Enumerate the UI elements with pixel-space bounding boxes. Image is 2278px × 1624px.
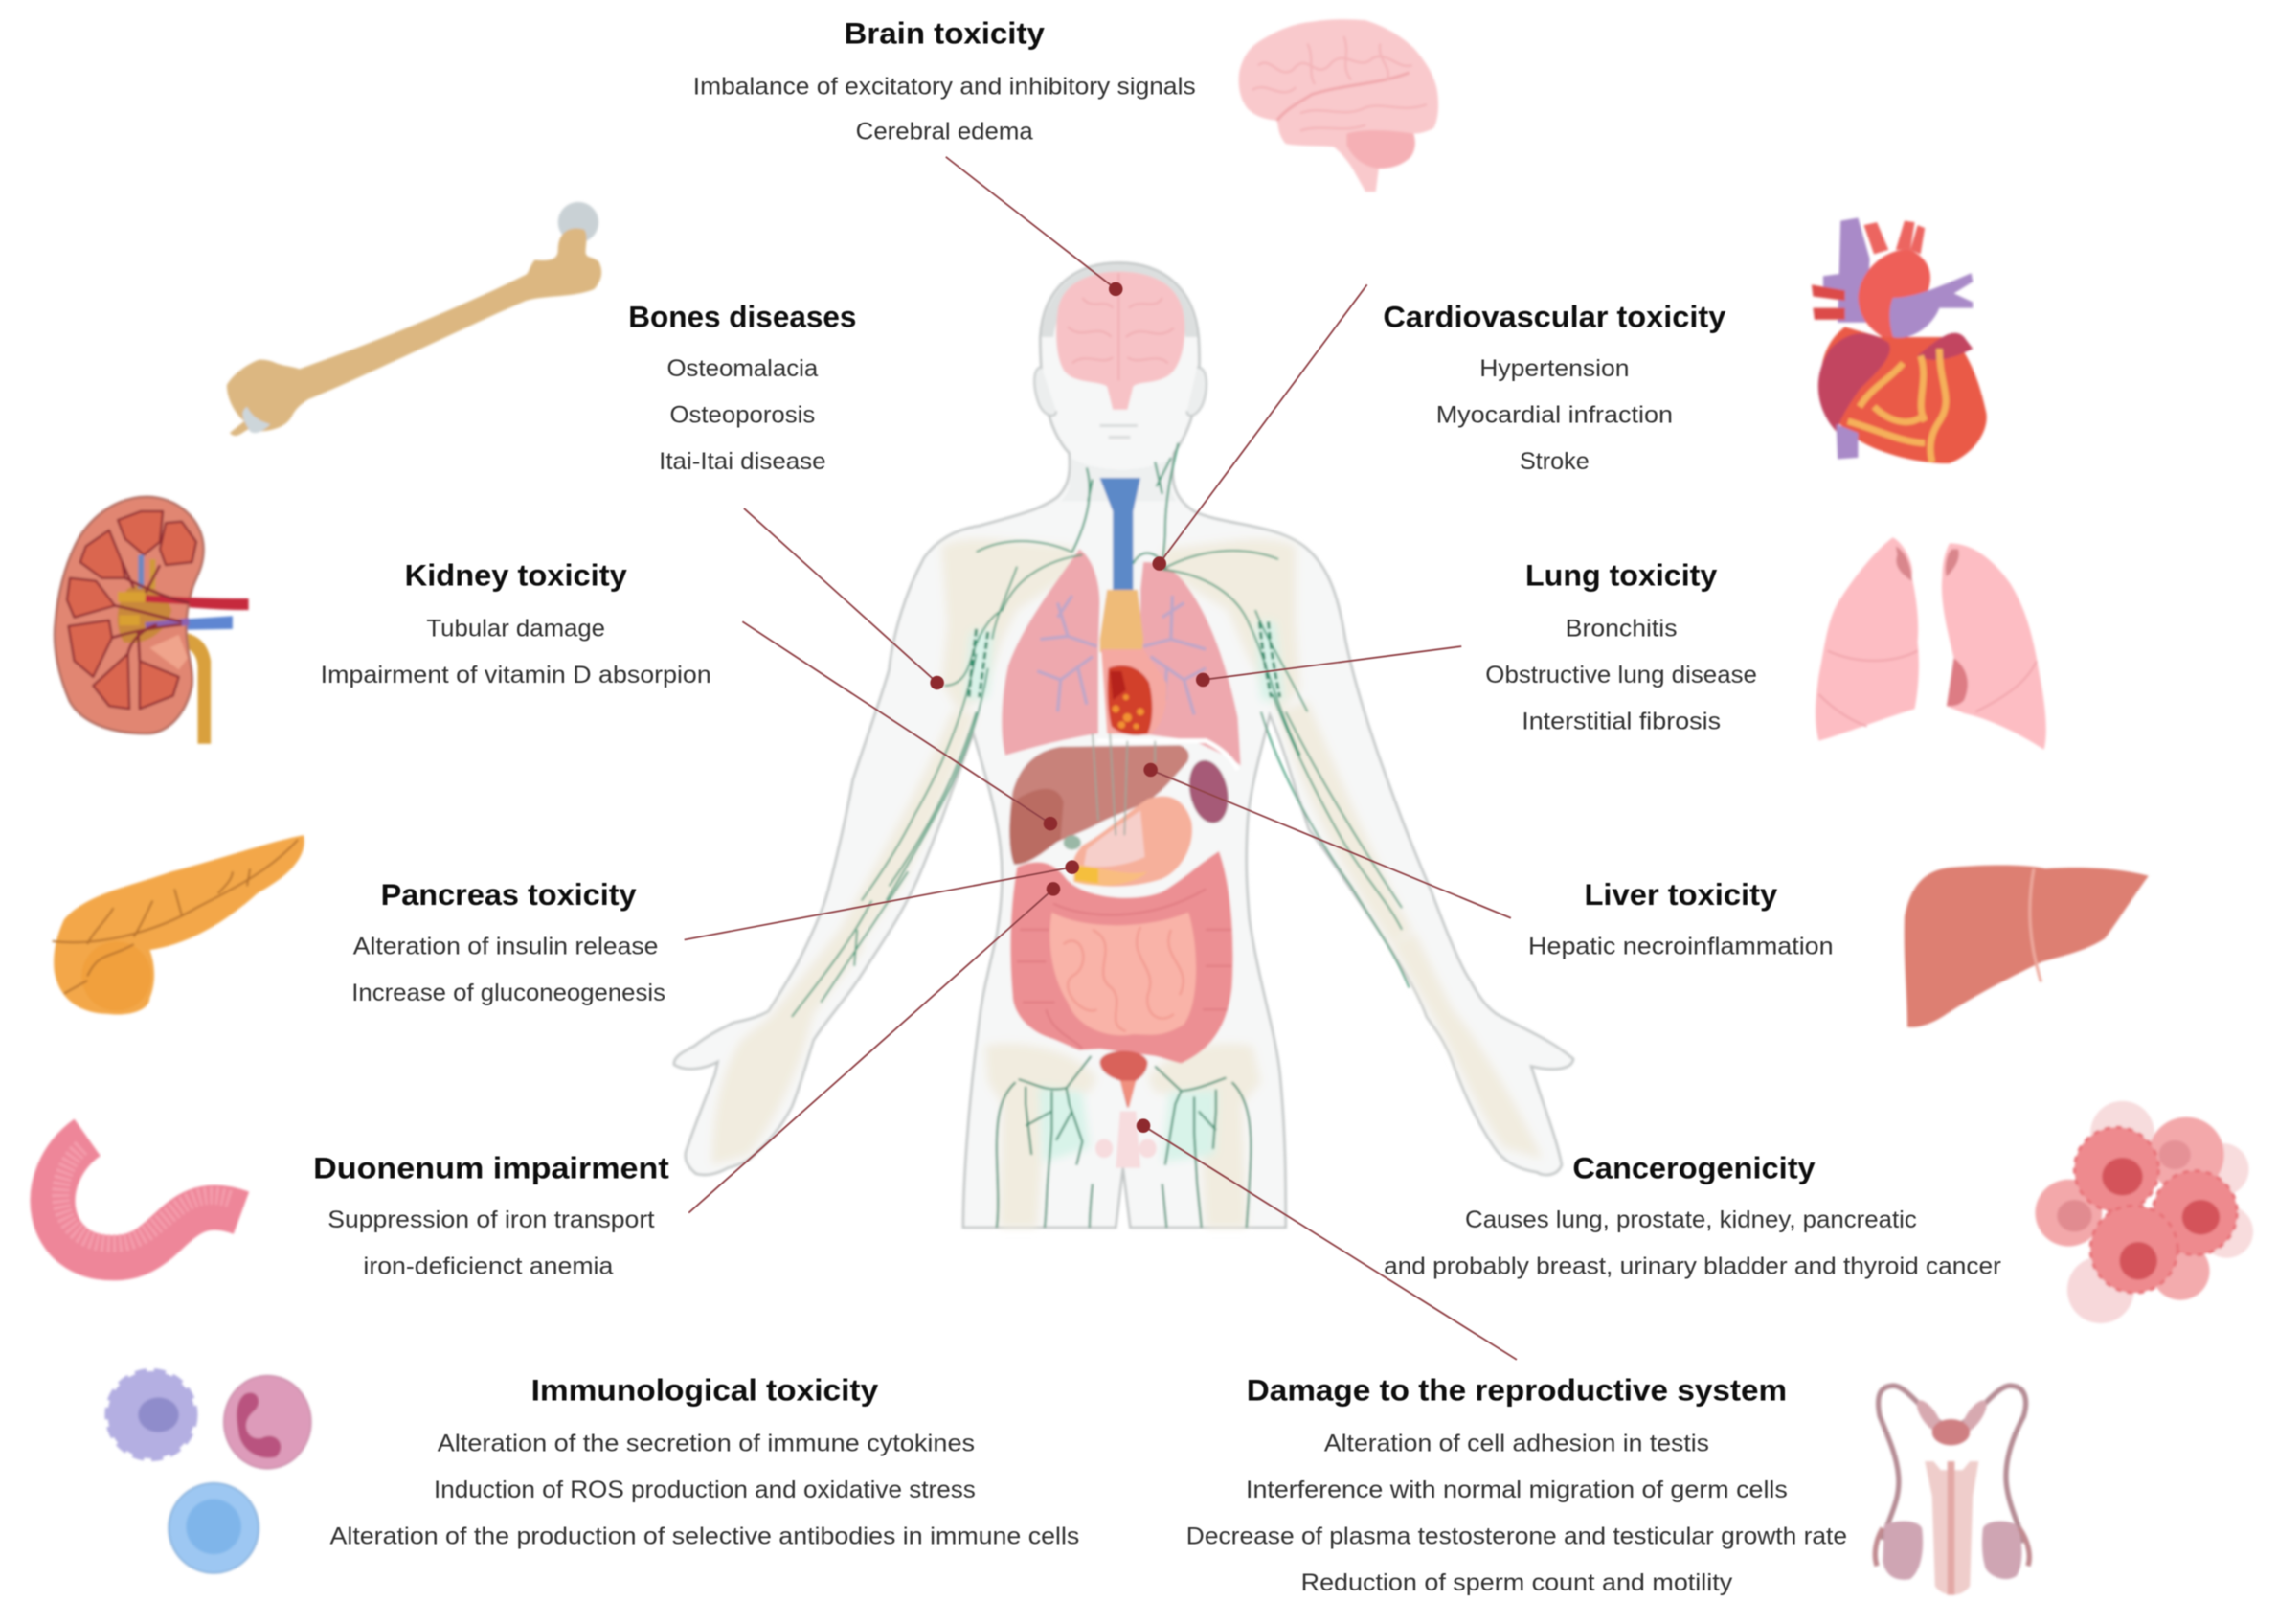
heading: Liver toxicity <box>1584 877 1778 912</box>
colon haustra <box>1017 889 1232 1049</box>
trachea <box>1100 478 1140 593</box>
neck and shoulder shading <box>1061 458 1177 501</box>
aorta <box>1858 250 1930 349</box>
upper heart <box>1101 649 1166 735</box>
stomach pale area <box>1084 810 1145 867</box>
skeleton bones in arms, shoulders and pelvis <box>712 539 1543 1228</box>
icon: male reproductive system <box>1875 1386 2029 1595</box>
text: Interstitial fibrosis <box>1522 709 1721 735</box>
heading: Duonenum impairment <box>313 1150 669 1184</box>
lymph chains in upper arms <box>969 621 1280 697</box>
text: Myocardial infraction <box>1436 401 1673 428</box>
labels <box>313 16 2001 1596</box>
urethra <box>1120 1081 1136 1108</box>
panel: cardiovascular toxicity <box>1383 299 1726 475</box>
heading: Pancreas toxicity <box>381 877 637 912</box>
face features <box>1100 425 1138 438</box>
text: Induction of ROS production and oxidative stress <box>434 1477 976 1503</box>
inferior vena cava <box>1837 424 1858 459</box>
gallbladder <box>1064 835 1081 849</box>
text: Osteomalacia <box>666 355 818 382</box>
icon: femur bone <box>227 202 601 436</box>
icon: brain <box>1239 19 1438 192</box>
lymphatic system lines <box>792 443 1410 1017</box>
text: Alteration of the secretion of immune cytokines <box>438 1430 975 1456</box>
heading: Kidney toxicity <box>405 557 627 592</box>
text: Bronchitis <box>1566 615 1678 642</box>
liver lower lobe <box>1009 789 1064 865</box>
right lung <box>1140 562 1241 765</box>
text: Alteration of the production of selective antibodies in immune cells <box>330 1523 1079 1550</box>
heart dark chamber <box>1110 671 1126 700</box>
icon: heart <box>1812 218 1987 463</box>
small intestine <box>1049 913 1196 1035</box>
text: Hypertension <box>1479 355 1629 382</box>
text: Cerebral edema <box>856 119 1033 146</box>
reproductive organs in body <box>1095 1112 1157 1168</box>
text: Interference with normal migration of germ cells <box>1246 1477 1788 1503</box>
pink cell <box>224 1376 311 1469</box>
text: Increase of gluconeogenesis <box>351 980 665 1006</box>
stomach <box>1072 797 1192 887</box>
heading: Lung toxicity <box>1525 557 1718 592</box>
coronary vessels <box>1848 349 1946 462</box>
heading: Cancerogenicity <box>1572 1150 1816 1184</box>
connector lines <box>685 157 1517 1360</box>
text: Reduction of sperm count and motility <box>1301 1569 1733 1596</box>
panel: duodenum impairment <box>313 1150 669 1279</box>
heading: Immunological toxicity <box>531 1372 878 1407</box>
line: reproductive <box>1143 1126 1517 1360</box>
text: Alteration of insulin release <box>353 934 658 960</box>
liver <box>1009 745 1189 865</box>
line: bones <box>744 508 937 683</box>
icon: liver <box>1905 866 2149 1027</box>
connector dots <box>930 282 1210 1133</box>
line: kidney <box>742 621 1050 823</box>
text: Imbalance of excitatory and inhibitory signals <box>693 74 1196 101</box>
pancreas yellow head <box>1075 866 1098 883</box>
panel: reproductive system <box>1186 1372 1847 1596</box>
brain folds <box>1068 273 1174 380</box>
great veins <box>1838 218 1870 323</box>
text: Stroke <box>1520 448 1590 475</box>
skull cap shading <box>1042 264 1197 337</box>
line: lung <box>1203 646 1461 680</box>
pulmonary artery <box>1889 273 1973 338</box>
line: brain <box>946 157 1116 289</box>
icon: immune cells <box>107 1371 311 1573</box>
lymph nodes in groin <box>997 1056 1251 1228</box>
text: Osteoporosis <box>670 401 815 428</box>
panel: lung toxicity <box>1485 557 1757 735</box>
bronchi <box>1037 596 1206 714</box>
icon: kidney <box>55 497 249 744</box>
colon <box>1010 851 1233 1063</box>
panel: kidney toxicity <box>321 557 711 688</box>
text: Obstructive lung disease <box>1485 662 1757 688</box>
icon: lungs <box>1816 537 2046 750</box>
heart highlights <box>1112 694 1144 730</box>
human body figure <box>674 263 1573 1228</box>
text: Decrease of plasma testosterone and testicular growth rate <box>1186 1523 1847 1550</box>
panel: immunological toxicity <box>330 1372 1079 1550</box>
intestine loops <box>1064 927 1184 1031</box>
blue cell <box>169 1483 259 1573</box>
heading: Cardiovascular toxicity <box>1383 299 1726 333</box>
text: Hepatic necroinflammation <box>1528 934 1834 960</box>
icon: pancreas <box>53 835 304 1015</box>
pancreas in body <box>1073 865 1148 886</box>
text: Impairment of vitamin D absorpion <box>321 662 711 688</box>
heading: Bones diseases <box>628 299 856 333</box>
mint highlights around lymph <box>964 621 1284 1162</box>
white gap above liver <box>1097 741 1238 770</box>
text: and probably breast, urinary bladder and thyroid cancer <box>1384 1252 2001 1279</box>
oesophagus section <box>1100 590 1143 652</box>
text: Itai-Itai disease <box>659 448 826 475</box>
heart <box>1108 665 1152 735</box>
text: Causes lung, prostate, kidney, pancreatic <box>1465 1207 1917 1233</box>
panel: bones diseases <box>628 299 856 475</box>
panel: pancreas toxicity <box>351 877 665 1006</box>
left lung <box>1002 549 1100 756</box>
line: cardiovascular <box>1160 284 1367 564</box>
right atrium <box>1818 333 1890 433</box>
bladder <box>1100 1051 1148 1108</box>
body silhouette <box>674 263 1573 1228</box>
panel: cancerogenicity <box>1384 1150 2001 1279</box>
panel: liver toxicity <box>1528 877 1834 960</box>
icon: duodenum <box>53 1138 241 1258</box>
text: Alteration of cell adhesion in testis <box>1324 1430 1709 1456</box>
icon: cancer cells <box>2035 1101 2253 1323</box>
spleen <box>1184 756 1234 827</box>
brain in head <box>1056 272 1184 410</box>
panel: brain toxicity <box>693 16 1196 146</box>
ears <box>1034 368 1207 416</box>
line: duodenum <box>688 889 1053 1213</box>
ventricles <box>1821 327 1987 463</box>
text: Tubular damage <box>426 615 605 642</box>
text: iron-deficienct anemia <box>363 1252 613 1279</box>
heading: Brain toxicity <box>845 16 1045 51</box>
left atrium <box>1918 333 1973 360</box>
heading: Damage to the reproductive system <box>1247 1372 1787 1407</box>
line: liver <box>1151 770 1511 918</box>
line: pancreas <box>685 868 1072 939</box>
text: Suppression of iron transport <box>327 1207 655 1233</box>
purple cell <box>107 1371 194 1458</box>
